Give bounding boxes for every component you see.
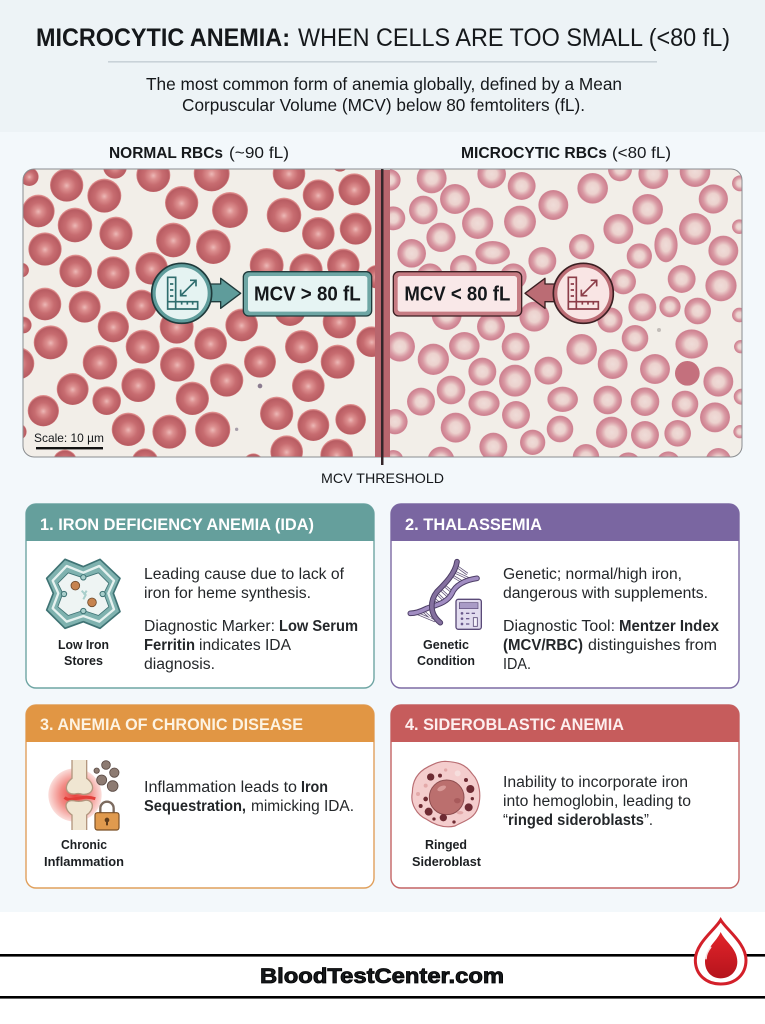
description: dangerous with supplements. <box>503 585 708 602</box>
subtitle: Corpuscular Volume (MCV) below 80 femtoliters (fL). <box>182 95 585 115</box>
heading: microcytic RBCs: MICROCYTIC RBCs <box>461 145 607 162</box>
description <box>503 566 719 673</box>
icon label <box>58 638 109 668</box>
callout: MCV above 80 <box>152 263 372 323</box>
callout: MCV below 80: MCV < 80 fL <box>404 284 510 306</box>
subtitle <box>146 74 622 115</box>
brand name: BloodTestCenter.com <box>260 965 504 988</box>
description: Diagnostic Marker: <box>144 618 275 635</box>
icon label: Low Iron <box>58 638 109 652</box>
description <box>144 566 358 673</box>
heading: microcytic RBCs: (<80 fL) <box>612 145 671 162</box>
heading: 2. THALASSEMIA <box>405 515 542 534</box>
heading: 1. IRON DEFICIENCY ANEMIA (IDA) <box>40 515 314 534</box>
description: indicates IDA <box>199 637 292 654</box>
icon label: Inflammation <box>44 855 124 869</box>
icon label: Sideroblast <box>412 855 482 869</box>
description: Low Serum <box>279 618 358 635</box>
heading: 4. SIDEROBLASTIC ANEMIA <box>405 715 624 734</box>
icon label <box>417 638 475 668</box>
description: Inability to incorporate iron <box>503 774 688 791</box>
panel: anemia of chronic disease <box>26 705 374 888</box>
description: distinguishes from <box>588 637 717 654</box>
panel: blood smear comparison <box>22 168 742 458</box>
icon label: Genetic <box>423 638 469 652</box>
title: WHEN CELLS ARE TOO SMALL (<80 fL) <box>298 24 730 52</box>
description: Leading cause due to lack of <box>144 566 345 583</box>
normal red blood cell field <box>24 170 375 456</box>
icon label: Stores <box>64 654 103 668</box>
threshold label: MCV THRESHOLD <box>321 470 444 486</box>
subtitle: The most common form of anemia globally, defined by a Mean <box>146 74 622 94</box>
icon: inflamed joint with locked iron <box>48 760 119 830</box>
heading: normal RBCs: (~90 fL) <box>229 145 289 162</box>
description: ringed sideroblasts <box>508 812 644 829</box>
heading: normal RBCs <box>109 145 289 162</box>
callout: MCV above 80: MCV > 80 fL <box>254 284 361 306</box>
description: Inflammation leads to <box>144 779 297 796</box>
description: diagnosis. <box>144 656 215 673</box>
MCV threshold divider <box>375 169 390 465</box>
icon: DNA helix and calculator <box>410 562 481 629</box>
description: Sequestration, <box>144 798 246 815</box>
icon label: Chronic <box>61 838 107 852</box>
panel: thalassemia <box>391 504 739 688</box>
description: “ <box>503 812 508 829</box>
microcytic red blood cell field <box>390 170 742 456</box>
icon: ringed sideroblast <box>412 761 480 827</box>
description: into hemoglobin, leading to <box>503 793 691 810</box>
description: ”. <box>644 812 653 829</box>
panel: sideroblastic anemia <box>391 705 739 888</box>
description: Iron <box>301 779 328 796</box>
heading: microcytic RBCs <box>461 145 671 162</box>
description: IDA. <box>503 656 531 673</box>
description <box>503 774 691 829</box>
description: Diagnostic Tool: <box>503 618 615 635</box>
icon label: Ringed <box>425 838 467 852</box>
icon label <box>44 838 124 869</box>
icon: ferritin cage <box>47 559 120 628</box>
description: Mentzer Index <box>619 618 719 635</box>
panel: iron deficiency anemia <box>26 504 374 688</box>
description <box>144 779 354 815</box>
description: iron for heme synthesis. <box>144 585 311 602</box>
title <box>36 24 730 52</box>
icon label <box>412 838 482 869</box>
heading: 3. ANEMIA OF CHRONIC DISEASE <box>40 715 303 734</box>
title: MICROCYTIC ANEMIA: <box>36 24 290 52</box>
description: Genetic; normal/high iron, <box>503 566 682 583</box>
icon: blood drop logo <box>695 920 746 984</box>
scale bar: Scale: 10 µm <box>34 431 104 445</box>
description: Ferritin <box>144 637 195 654</box>
description: (MCV/RBC) <box>503 637 583 654</box>
heading: normal RBCs: NORMAL RBCs <box>109 145 223 162</box>
description: mimicking IDA. <box>251 798 354 815</box>
icon label: Condition <box>417 654 475 668</box>
callout: MCV below 80 <box>393 263 613 323</box>
